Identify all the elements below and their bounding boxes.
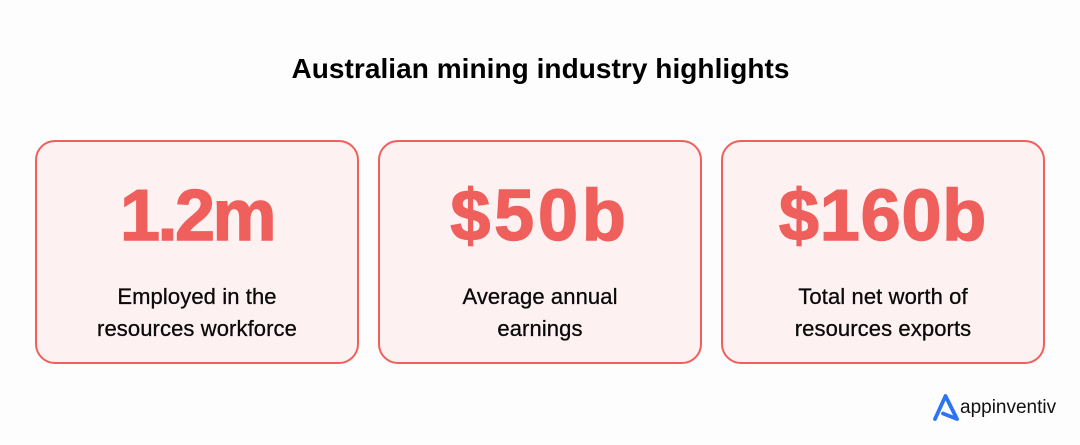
- label: exports: Total net worth of: [798, 284, 968, 309]
- label: employed: Employed in the: [117, 284, 277, 309]
- stat: $160b: $160b: [779, 176, 987, 256]
- label: exports: [795, 284, 971, 341]
- label: employed: [97, 284, 297, 341]
- label: earnings: earnings: [497, 316, 583, 341]
- stat: 1.2m: 1.2m: [120, 176, 274, 256]
- panel: resources exports: [721, 140, 1045, 364]
- panel: annual earnings: [378, 140, 702, 364]
- panel: employed workforce: [35, 140, 359, 364]
- icon: logo arrow: [933, 394, 959, 421]
- label: exports: resources exports: [795, 316, 971, 341]
- label: employed: resources workforce: [97, 316, 297, 341]
- stat: $50b: $50b: [450, 176, 630, 256]
- logo wordmark: appinventiv: [960, 397, 1056, 418]
- logo: appinventiv: [933, 394, 1056, 421]
- label: earnings: Average annual: [462, 284, 618, 309]
- title: Australian mining industry highlights: [291, 53, 790, 84]
- label: earnings: [462, 284, 618, 341]
